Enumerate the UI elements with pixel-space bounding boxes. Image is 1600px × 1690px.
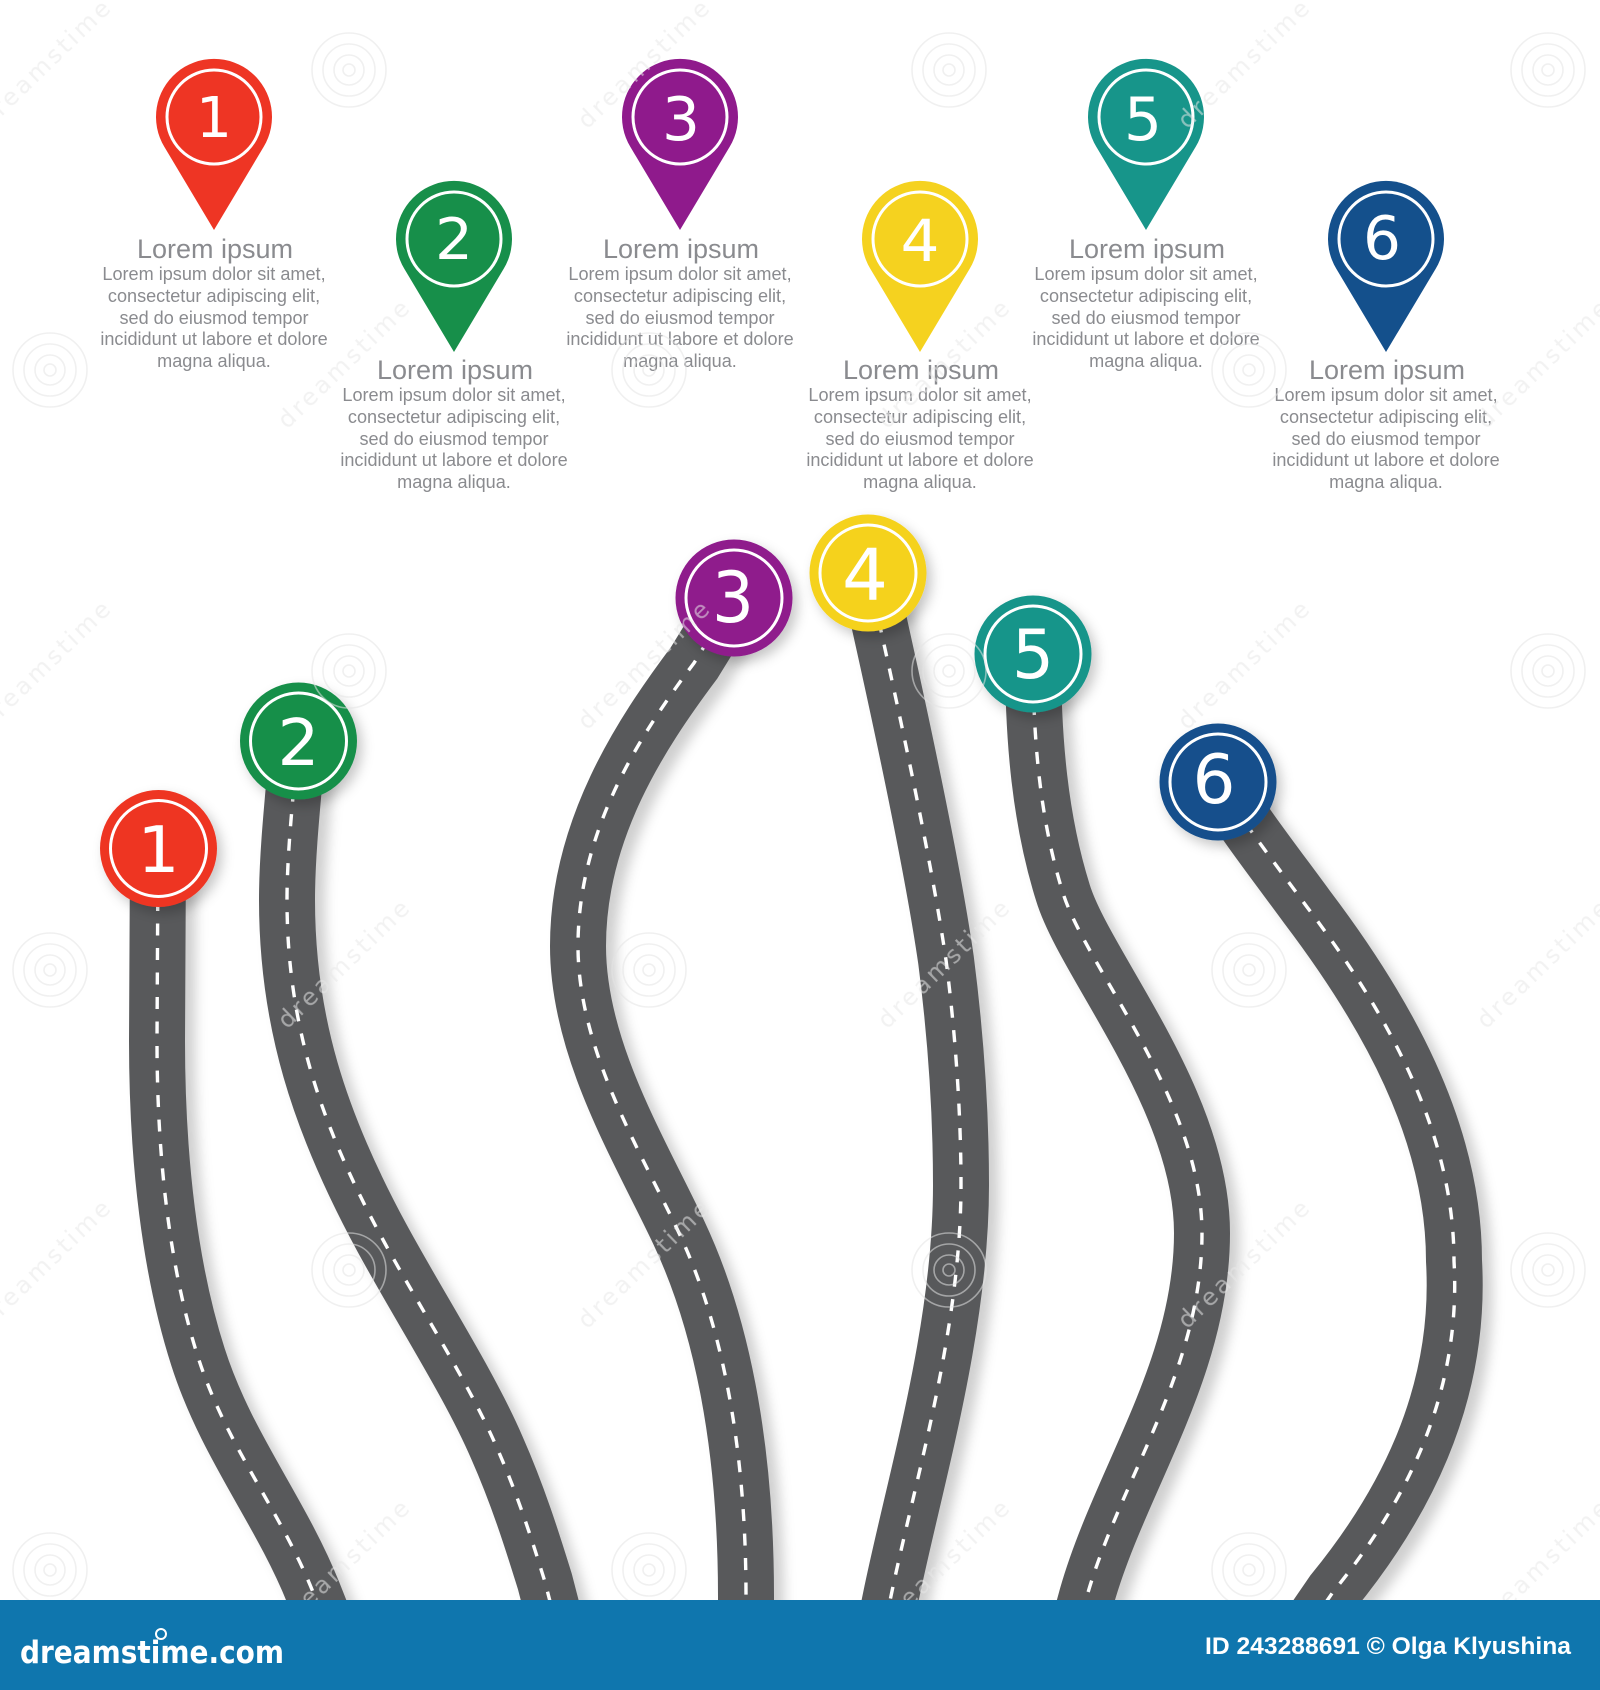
- pin 4: [862, 181, 978, 352]
- pin 2 text: sed do eiusmod tempor: [359, 429, 549, 449]
- pin 2: 2: [435, 207, 473, 273]
- text: dreamstime: [572, 1194, 715, 1334]
- pin 1 text: sed do eiusmod tempor: [119, 308, 309, 328]
- pin 6 text: sed do eiusmod tempor: [1291, 429, 1481, 449]
- pin 2 text: [340, 355, 568, 492]
- pin 5 text: consectetur adipiscing elit,: [1040, 286, 1252, 306]
- pin 5 text: Lorem ipsum dolor sit amet,: [1034, 264, 1258, 284]
- pin 5 text: magna aliqua.: [1089, 351, 1203, 371]
- road 3: [578, 598, 746, 1640]
- pin 6 text: Lorem ipsum dolor sit amet,: [1274, 385, 1498, 405]
- road marker 5: 5: [1012, 616, 1054, 695]
- pin 1 text: consectetur adipiscing elit,: [108, 286, 320, 306]
- pin 1 text: magna aliqua.: [157, 351, 271, 371]
- pin 6 text: incididunt ut labore et dolore: [1272, 450, 1500, 470]
- footer banner: [0, 1600, 1600, 1690]
- pin 3 text: consectetur adipiscing elit,: [574, 286, 786, 306]
- road marker 5: [974, 596, 1092, 712]
- pin 6: 6: [1363, 204, 1401, 274]
- pin 5 text: Lorem ipsum: [1069, 234, 1225, 264]
- road marker 3: [676, 540, 792, 656]
- pin 3 text: Lorem ipsum dolor sit amet,: [568, 264, 792, 284]
- pin 5: 5: [1124, 85, 1162, 155]
- pin 3 text: magna aliqua.: [623, 351, 737, 371]
- pin 5 text: [1032, 234, 1260, 371]
- pin 2 text: magna aliqua.: [397, 472, 511, 492]
- pin 4 text: consectetur adipiscing elit,: [814, 407, 1026, 427]
- pin 1: [156, 59, 272, 230]
- pin 4 text: [806, 355, 1034, 492]
- pin 3 text: incididunt ut labore et dolore: [566, 329, 794, 349]
- text: dreamstime: [872, 294, 1015, 434]
- road 1: [157, 850, 332, 1640]
- road marker 1: 1: [138, 814, 180, 888]
- road marker 6: 6: [1192, 741, 1236, 820]
- text: dreamstime: [872, 1494, 1015, 1634]
- text: dreamstime: [272, 294, 415, 434]
- pin 5 text: incididunt ut labore et dolore: [1032, 329, 1260, 349]
- text: dreamstime: [1172, 1194, 1315, 1334]
- road 2: [287, 741, 560, 1640]
- pin 4: 4: [900, 207, 940, 275]
- pin 1 text: Lorem ipsum: [137, 234, 293, 264]
- road marker 1: [100, 790, 217, 907]
- road marker 4: [810, 514, 926, 632]
- pin 6: [1328, 181, 1444, 352]
- pin 4 text: Lorem ipsum dolor sit amet,: [808, 385, 1032, 405]
- road marker 6: [1160, 724, 1276, 840]
- pin 3 text: sed do eiusmod tempor: [585, 308, 775, 328]
- road marker 2: 2: [278, 707, 320, 781]
- footer credit: ID 243288691 © Olga Klyushina: [1205, 1633, 1572, 1660]
- pin 1 text: [100, 234, 328, 371]
- pin 3 text: Lorem ipsum: [603, 234, 759, 264]
- pin 3: [622, 59, 738, 230]
- pin 2 text: incididunt ut labore et dolore: [340, 450, 568, 470]
- road 6: [1218, 782, 1455, 1640]
- pin 3: 3: [662, 85, 700, 155]
- footer logo: dreamstime.com: [20, 1635, 284, 1671]
- pin 2 text: Lorem ipsum dolor sit amet,: [342, 385, 566, 405]
- road marker 2: [240, 682, 357, 800]
- pin 5 text: sed do eiusmod tempor: [1051, 308, 1241, 328]
- pin 2: [396, 181, 512, 352]
- road shadows: [167, 581, 1465, 1648]
- pin 2 text: Lorem ipsum: [377, 355, 533, 385]
- road 4: [868, 573, 961, 1640]
- pin 4 text: magna aliqua.: [863, 472, 977, 492]
- pin 2 text: consectetur adipiscing elit,: [348, 407, 560, 427]
- text: dreamstime: [1172, 595, 1315, 735]
- text: dreamstime: [572, 595, 715, 735]
- pin 6 text: Lorem ipsum: [1309, 355, 1465, 385]
- pin 4 text: sed do eiusmod tempor: [825, 429, 1015, 449]
- pin 3 text: [566, 234, 794, 371]
- road 5: [1033, 654, 1202, 1640]
- pin 6 text: [1272, 355, 1500, 492]
- pin 1 text: Lorem ipsum dolor sit amet,: [102, 264, 326, 284]
- text: dreamstime: [872, 894, 1015, 1034]
- text: dreamstime: [272, 1494, 415, 1634]
- pin 6 text: consectetur adipiscing elit,: [1280, 407, 1492, 427]
- pin 1: 1: [196, 86, 232, 151]
- pin 1 text: incididunt ut labore et dolore: [100, 329, 328, 349]
- road marker 4: 4: [842, 534, 888, 617]
- road marker 3: 3: [712, 557, 754, 639]
- pin 6 text: magna aliqua.: [1329, 472, 1443, 492]
- pin 4 text: Lorem ipsum: [843, 355, 999, 385]
- text: dreamstime: [272, 894, 415, 1034]
- pin 5: [1088, 59, 1204, 230]
- pin 4 text: incididunt ut labore et dolore: [806, 450, 1034, 470]
